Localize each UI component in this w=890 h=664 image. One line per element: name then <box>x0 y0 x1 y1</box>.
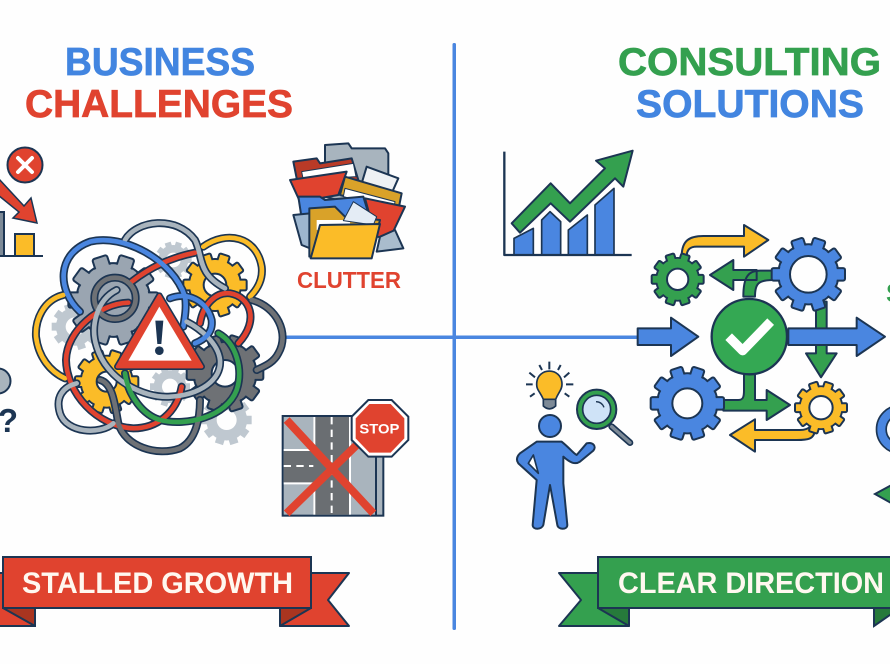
title: consulting solutions: SOLUTIONS <box>636 83 864 126</box>
banner: clear direction <box>559 557 890 626</box>
arrow: blue input <box>638 318 698 356</box>
title: business challenges: CHALLENGES <box>25 83 293 126</box>
horizontal connector line <box>284 336 640 339</box>
arrow: green left <box>710 260 773 297</box>
title: business challenges: BUSINESS <box>65 41 255 84</box>
arrow: yellow bottom <box>730 419 815 452</box>
gear: green <box>652 253 704 305</box>
arrow: green bottom <box>723 373 790 420</box>
title: business challenges <box>25 41 293 126</box>
icon: cluttered folders <box>290 143 405 258</box>
vertical divider <box>452 43 456 630</box>
arrow: green down <box>806 302 837 377</box>
icon: green check circle <box>712 299 787 374</box>
icon: confused figure with question mark <box>0 368 18 439</box>
icon: tangled gears and cables with warning <box>36 223 283 451</box>
diagram: process gears with check <box>638 225 885 452</box>
partial icons at right edge <box>875 410 890 503</box>
title: consulting solutions: CONSULTING <box>618 41 881 84</box>
icon: person with lightbulb and magnifier <box>517 362 630 529</box>
banner: stalled growth <box>0 557 349 626</box>
icon: declining chart with error badge <box>0 148 43 256</box>
gear: blue bottom <box>651 367 724 440</box>
banner: stalled growth: STALLED GROWTH <box>22 567 293 600</box>
label: clutter: CLUTTER <box>297 267 401 293</box>
arrow: yellow top <box>682 225 768 257</box>
icon: growth chart with rising arrow <box>504 151 633 255</box>
gear: yellow <box>795 382 847 434</box>
title: consulting solutions <box>618 41 881 126</box>
icon: blocked road with stop sign <box>283 400 408 516</box>
banner: clear direction: CLEAR DIRECTION <box>618 567 884 600</box>
gear: blue top <box>772 238 845 311</box>
icon: blocked road with stop sign: STOP <box>359 420 399 436</box>
arrow: blue output <box>788 318 885 356</box>
